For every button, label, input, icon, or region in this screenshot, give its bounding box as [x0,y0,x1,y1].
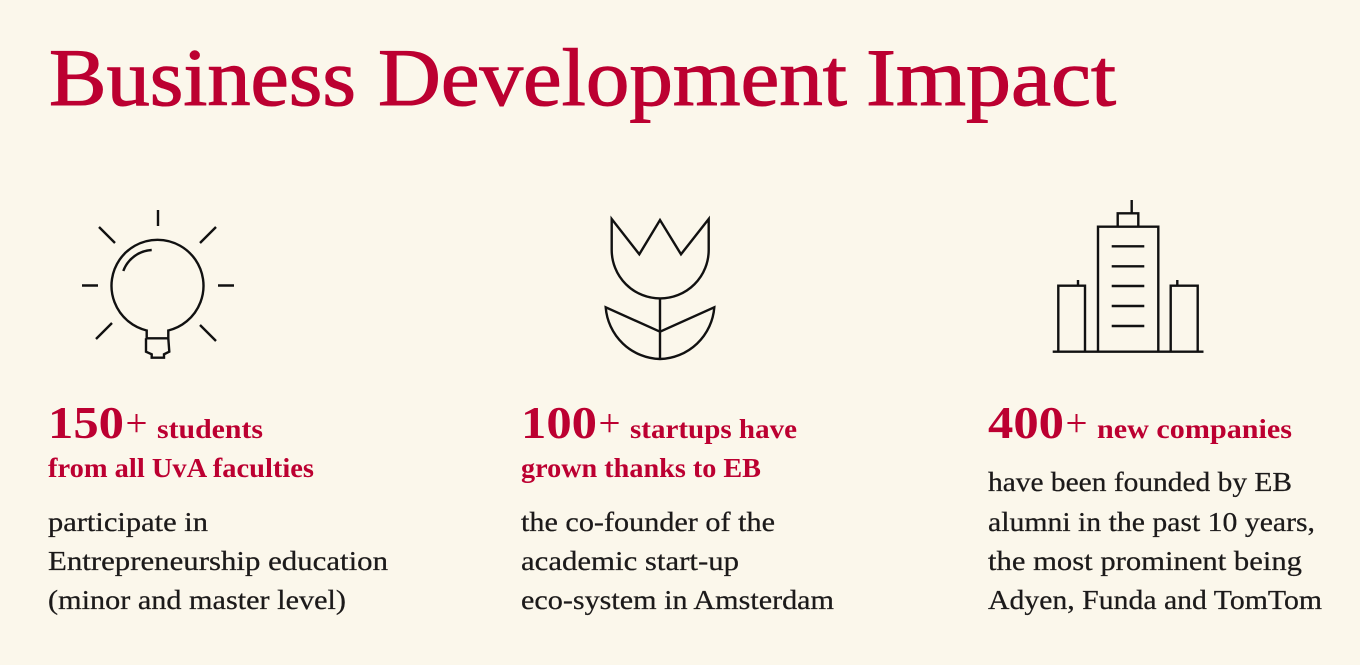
heading: 100+ startups have: + [598,402,620,445]
panel: companies [988,200,1322,615]
body text: companies: have been founded by EB [988,466,1292,497]
panel: students [48,210,388,615]
heading: 100+ startups have: 100 [521,397,597,448]
heading: 400+ new companies [988,397,1292,448]
heading: 400+ new companies: 400 [988,397,1064,448]
icon: light bulb [82,210,234,358]
heading: 100+ startups have: startups have [630,414,797,444]
heading: 400+ new companies: new companies [1097,414,1292,444]
title: Development [378,32,847,123]
heading: 150+ students: + [126,402,148,445]
body text: startups: the co-founder of the [521,506,775,537]
icon: buildings [1053,200,1204,352]
title: Business [49,32,356,123]
icon: tulip [606,219,714,359]
body text: startups: eco-system in Amsterdam [521,584,834,615]
body text: students: participate in [48,506,208,537]
subheading: from all UvA faculties: from all UvA faculties [48,453,314,483]
subheading: grown thanks to EB: grown thanks to EB [521,453,761,483]
heading: 100+ startups have [521,397,797,448]
title: Impact [866,32,1116,123]
body text: companies: the most prominent being [988,545,1302,576]
heading: 150+ students [48,397,263,448]
body text: startups [521,506,834,615]
title [49,32,1116,123]
heading: 150+ students: 150 [48,397,124,448]
body text: students: Entrepreneurship education [48,545,388,576]
body text: companies [988,466,1322,615]
panel: startups [521,219,834,615]
body text: companies: Adyen, Funda and TomTom [988,584,1322,615]
heading: 150+ students: students [157,414,263,444]
heading: 400+ new companies: + [1066,402,1088,445]
body text: startups: academic start-up [521,545,739,576]
body text: companies: alumni in the past 10 years, [988,506,1315,537]
body text: students: (minor and master level) [48,584,346,615]
body text: students [48,506,388,615]
